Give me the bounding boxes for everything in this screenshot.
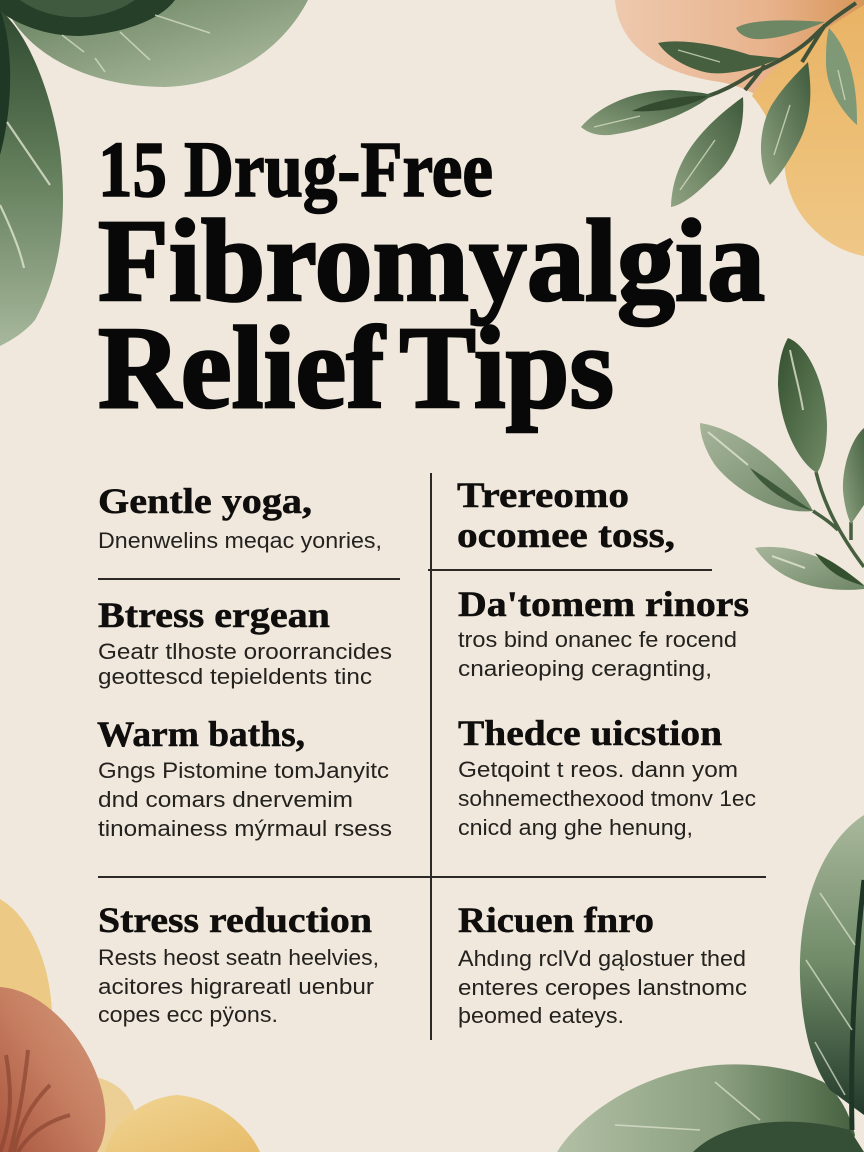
tip: thedce uicstion: Getqoint t reos. dann yom (458, 757, 738, 782)
leaf veins (594, 50, 845, 190)
tip: trereomo: ocomee toss, (457, 515, 675, 555)
tip: ricuen fnro (458, 900, 747, 1028)
tip: warm baths: Warm baths, (97, 714, 305, 754)
leaf 1 (581, 90, 712, 135)
leaf 6 (826, 28, 857, 125)
leaf 3 (761, 62, 810, 185)
lower leaf (755, 547, 864, 590)
bottom-right leaves (557, 815, 864, 1152)
peach fruit (615, 0, 864, 100)
tip: thedce uicstion: sohnemecthexood tmonv 1ec (458, 786, 756, 811)
grid dividers (98, 473, 766, 1040)
tip: stress reduction: Stress reduction (98, 900, 372, 940)
tip: warm baths: dnd comars dnervemim (98, 787, 353, 812)
branch stem (708, 3, 856, 96)
tip: gentle yoga: Gentle yoga, (98, 481, 312, 521)
title (98, 127, 765, 433)
tip: ricuen fnro: þeomed eateys. (458, 1003, 624, 1028)
top-right fruit and leaves (581, 0, 864, 256)
tip: warm baths: Gngs Pistomine tomJanyitc (98, 758, 389, 783)
tip: ricuen fnro: Ricuen fnro (458, 900, 654, 940)
upper leaf (778, 338, 827, 473)
tip: da'tomem rinors: Da'tomem rinors (458, 584, 749, 624)
tip: thedce uicstion: cnicd ang ghe henung, (458, 815, 693, 840)
tip: da'tomem rinors (458, 584, 749, 681)
tip: btress ergean: geottescd tepieldents tinc (98, 664, 372, 689)
tip: trereomo: Trereomo (457, 475, 629, 515)
tip: btress ergean: Geatr tlhoste oroorrancides (98, 639, 392, 664)
leaf 4 (658, 41, 780, 73)
top-left leaves (0, 0, 308, 346)
right-middle branch (700, 338, 864, 590)
tip: stress reduction: copes ecc pÿons. (98, 1002, 278, 1027)
tip: da'tomem rinors: tros bind onanec fe rocend (458, 627, 737, 652)
tip: btress ergean (98, 595, 392, 689)
leaf highlights (708, 350, 805, 568)
left leaf (700, 423, 813, 511)
right leaf (843, 428, 864, 524)
leaf 5 (736, 20, 825, 39)
tip: stress reduction: acitores higrareatl uenbur (98, 974, 374, 999)
tip: thedce uicstion: Thedce uicstion (458, 713, 722, 753)
tip: gentle yoga (98, 481, 382, 553)
title line 1: 15 Drug-Free (98, 127, 493, 214)
tip: warm baths (97, 714, 392, 841)
tip: stress reduction (98, 900, 379, 1027)
tip: warm baths: tinomainess mýrmaul rsess (98, 816, 392, 841)
tip: trereomo (457, 475, 675, 555)
tip: btress ergean: Btress ergean (98, 595, 330, 635)
title line 2: Fibromyalgia (98, 195, 765, 326)
tip: thedce uicstion (458, 713, 756, 840)
tip: gentle yoga: Dnenwelins meqac yonries, (98, 528, 382, 553)
yellow fruit (752, 5, 864, 256)
tip: stress reduction: Rests heost seatn heelvies, (98, 945, 379, 970)
title line 3: Relief Tips (98, 302, 614, 433)
leaf 2 (671, 97, 743, 207)
bottom-left fruit (0, 899, 260, 1152)
tip: ricuen fnro: Ahdıng rclVd gąlostuer thed (458, 946, 746, 971)
tip: ricuen fnro: enteres ceropes lanstnomc (458, 975, 747, 1000)
tip: da'tomem rinors: cnarieoping ceragnting, (458, 656, 712, 681)
